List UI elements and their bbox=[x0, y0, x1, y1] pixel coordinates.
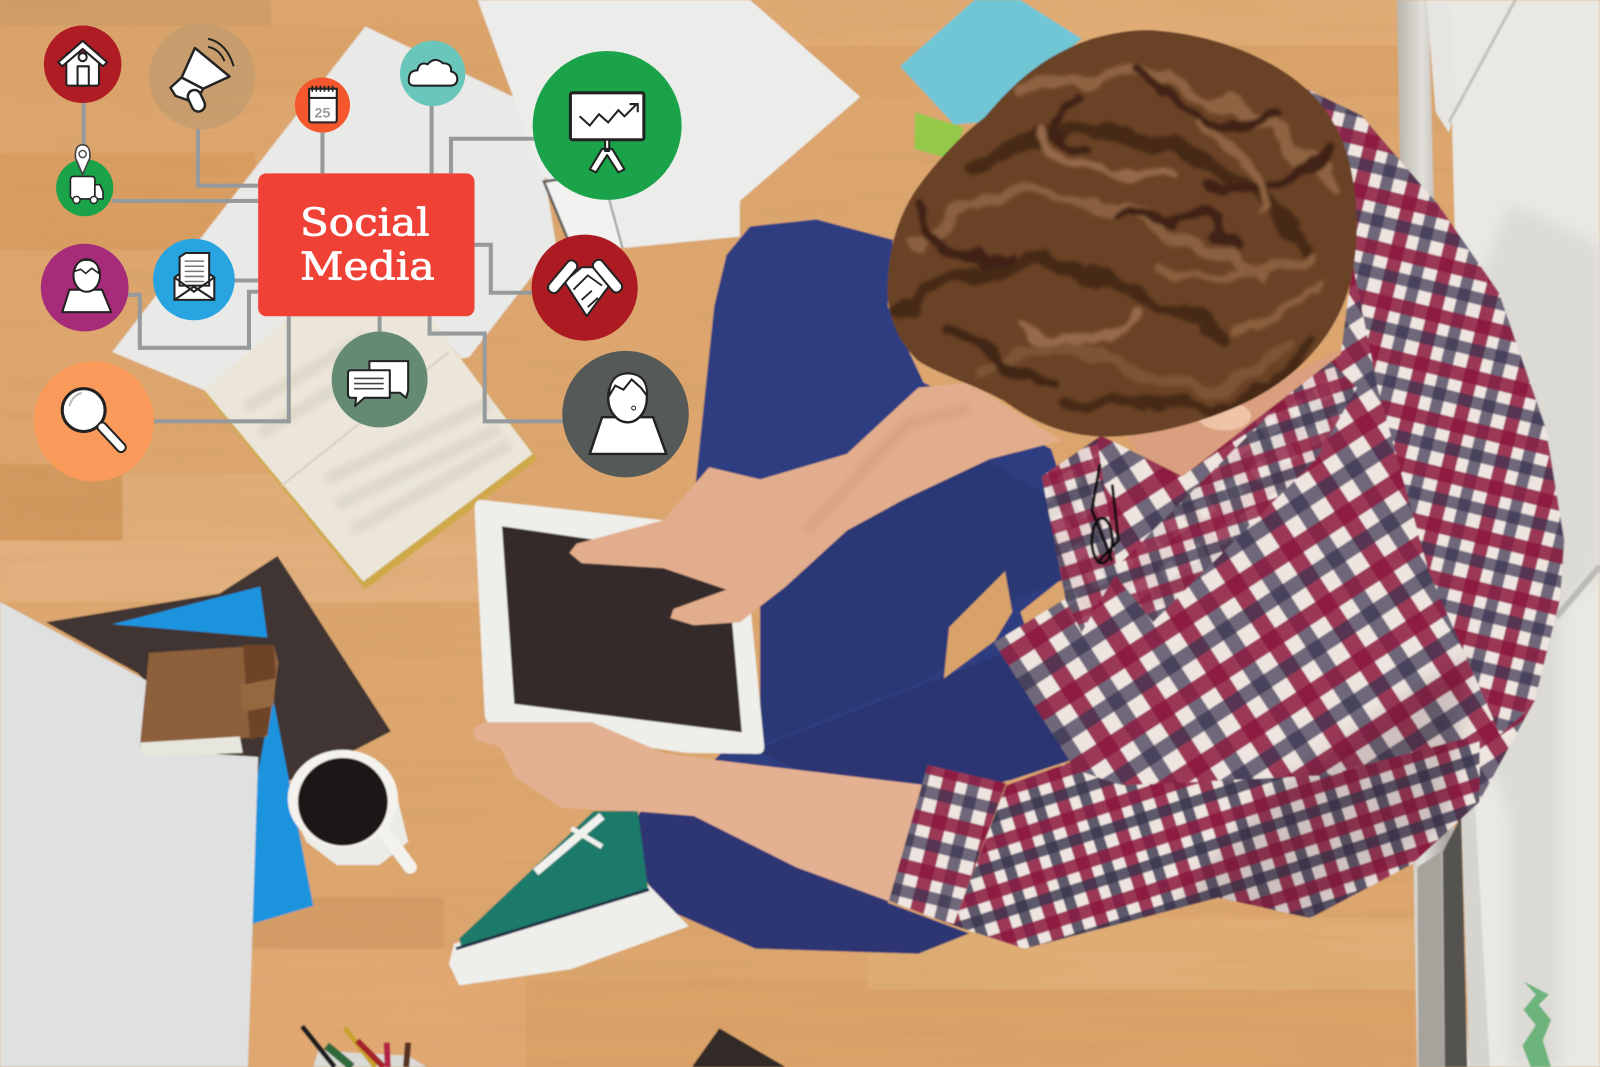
icon: handshake bbox=[532, 235, 638, 341]
icon: person grey bbox=[562, 351, 689, 477]
icon: chat bubbles bbox=[332, 332, 428, 427]
icon: delivery truck with location pin bbox=[56, 145, 113, 216]
tablet bbox=[474, 500, 764, 754]
phone bbox=[544, 173, 622, 248]
paper sheets top bbox=[112, 0, 860, 403]
rolled shirt cuff bbox=[889, 765, 1006, 925]
heading: Media: Media bbox=[300, 245, 435, 289]
stacked notebooks bbox=[900, 0, 1082, 159]
heading: Social: Social bbox=[300, 201, 430, 246]
window frame and outdoor area bbox=[1397, 0, 1600, 1067]
trousers bbox=[633, 219, 1071, 954]
icon: magnifying glass bbox=[34, 361, 154, 481]
icon: home bbox=[44, 26, 121, 103]
plaid shirt bbox=[952, 88, 1565, 950]
icon: envelope with letter bbox=[153, 239, 235, 320]
pointing arm and hand bbox=[569, 383, 1061, 625]
black notebook bottom bbox=[692, 1028, 786, 1067]
pencils holder bbox=[302, 1026, 427, 1067]
blue folder bbox=[112, 587, 313, 925]
central box: Social Media bbox=[258, 173, 474, 316]
icon: person purple bbox=[41, 244, 129, 332]
floor gap between legs bbox=[944, 571, 1012, 678]
white paper stack bbox=[0, 602, 258, 1067]
glasses bbox=[1092, 464, 1118, 563]
open book bbox=[204, 316, 538, 590]
wallet bbox=[140, 645, 279, 757]
holding arm and hand bbox=[472, 722, 929, 903]
calendar date: 25 bbox=[315, 105, 330, 121]
icon: megaphone bbox=[149, 23, 255, 130]
icon: presentation chart bbox=[533, 51, 682, 200]
neck bbox=[1122, 347, 1347, 479]
coffee cup bbox=[288, 750, 410, 867]
icon: cloud bbox=[400, 41, 465, 106]
icon: calendar bbox=[295, 78, 350, 133]
sneaker bbox=[449, 811, 689, 985]
dark folder bbox=[46, 556, 391, 791]
connector lines bbox=[84, 102, 566, 421]
hair bbox=[878, 20, 1367, 449]
